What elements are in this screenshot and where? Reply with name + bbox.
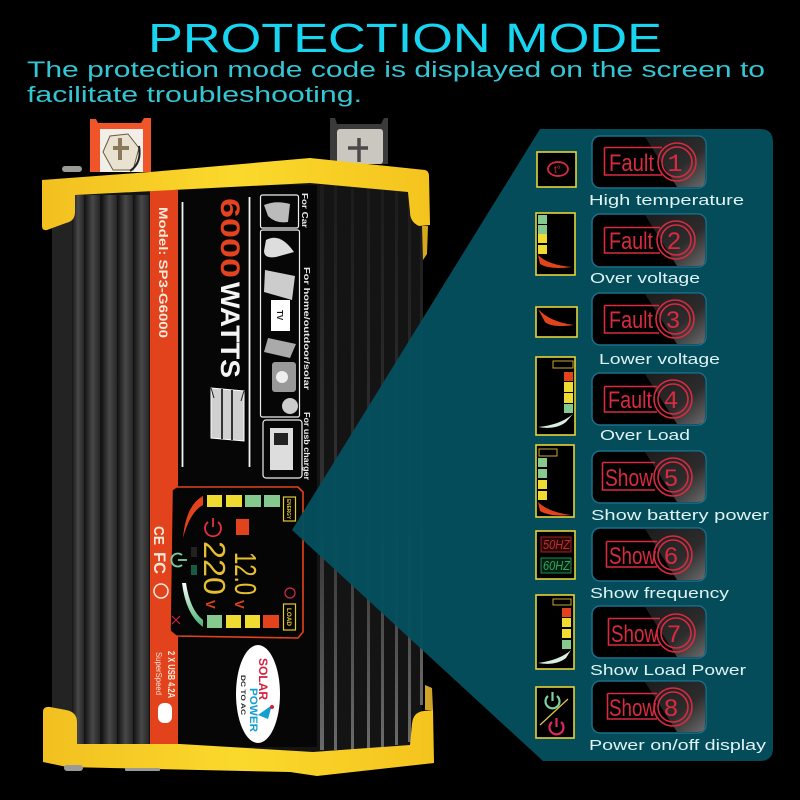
yellow bottom corner guard: [43, 707, 434, 776]
solar power logo: SOLAR: [256, 658, 270, 700]
fault display 4: Fault: [608, 387, 652, 414]
caption: Over Load: [600, 427, 690, 444]
icon: frequency: 60HZ: [543, 558, 571, 573]
icon: green power: [171, 554, 187, 566]
row 2: over voltage: [536, 213, 706, 287]
fault display 2: 2: [666, 228, 682, 257]
fault display 1: Fault: [609, 150, 654, 177]
usage captions: For home/outdoor/solar: [302, 267, 312, 391]
battery label: [284, 497, 296, 521]
icon: battery bars: [536, 445, 574, 517]
icon: temperature: t°: [554, 165, 561, 176]
icon: temperature: [537, 152, 576, 187]
callout panel: [292, 129, 773, 761]
left heat-sink fins: [52, 195, 149, 745]
icon: frequency: 50HZ: [543, 537, 571, 552]
fault display 1: 1: [667, 150, 683, 179]
6000 watts heading: [215, 198, 245, 378]
usage icon group: [260, 195, 302, 478]
certification marks: CE: [150, 526, 167, 545]
model text: Model: SP3-G6000: [156, 207, 168, 338]
icon: usb logo: [158, 703, 172, 723]
load label: LOAD: [285, 608, 291, 627]
fault display 3: Fault: [609, 307, 653, 334]
right heat-sink fins: [320, 185, 423, 750]
icon: inverter outline: [211, 388, 244, 441]
fault display 4: [592, 373, 706, 425]
yellow top corner guard: [42, 158, 430, 230]
yellow top sliver: [422, 226, 428, 260]
icon: positive terminal: [90, 118, 151, 172]
certification marks: FC: [150, 552, 169, 574]
title: PROTECTION MODE: [148, 15, 662, 61]
certification marks: [150, 526, 169, 598]
show display 6: 6: [663, 543, 679, 572]
caption: Show battery power: [591, 507, 769, 524]
body base: [52, 175, 422, 760]
row 4: over load: [536, 357, 706, 444]
show display 8: [592, 681, 706, 733]
fault display 2: [592, 214, 706, 267]
LCD screen: [170, 487, 303, 638]
usage captions: For Car: [300, 193, 310, 229]
row 7: show load power: [536, 595, 746, 679]
icon: frequency: [536, 531, 575, 579]
row 6: show frequency: [536, 528, 730, 602]
icon: battery: [236, 519, 249, 535]
show display 7: Show: [611, 621, 659, 648]
solar power logo: POWER: [247, 688, 259, 732]
volt units: V: [203, 600, 218, 609]
volt units: V: [232, 600, 247, 609]
icon: home appliances box: [260, 230, 300, 417]
inverter body: [52, 175, 423, 760]
subtitle text: The protection mode code is displayed on the screen to: [27, 57, 765, 82]
battery bars: [207, 495, 280, 507]
6000 watts heading: WATTS: [215, 282, 245, 378]
white rule lines: [182, 197, 250, 467]
yellow bottom sliver: [425, 685, 433, 710]
icon: usb charger box: [263, 420, 302, 478]
solar power logo: DC TO AC: [239, 675, 245, 716]
show display 8: Show: [609, 695, 657, 722]
icon: temperature: [285, 588, 295, 598]
solar power logo: [236, 645, 280, 743]
usage captions: For usb charger: [302, 412, 312, 481]
voltage digits: 12.0: [228, 552, 263, 595]
icon: red power: [205, 518, 221, 536]
red voltage arc: [183, 496, 203, 538]
fault display 1: [592, 136, 706, 188]
row 1: high temperature: [537, 136, 744, 209]
row 3: lower voltage: [536, 293, 720, 368]
caption: High temperature: [589, 192, 744, 209]
row 8: power on/off display: [536, 681, 767, 754]
caption: Over voltage: [590, 270, 700, 287]
fault display 2: Fault: [609, 228, 653, 255]
icon: voltage bars: [536, 213, 575, 275]
icon: negative terminal: [330, 118, 388, 164]
caption: Lower voltage: [599, 351, 720, 368]
show display 6: [592, 528, 706, 581]
usb spec text: SuperSpeed: [154, 652, 164, 695]
show display 5: Show: [605, 465, 654, 492]
caption: Power on/off display: [589, 737, 767, 754]
fault display 3: [592, 293, 706, 345]
show display 5: [592, 451, 706, 503]
orange band: [150, 190, 179, 745]
icon: fan: [172, 616, 180, 624]
load bars: [207, 615, 279, 628]
usage captions: [300, 193, 312, 481]
icon: power on off: [536, 687, 574, 738]
load label: [284, 604, 296, 630]
fault display 4: 4: [663, 387, 679, 416]
show display 7: 7: [666, 621, 682, 650]
fault display 3: 3: [665, 307, 681, 336]
usb spec text: 2 X USB 4.2A: [165, 651, 176, 698]
show display 6: Show: [609, 543, 657, 570]
icon: car box: [260, 195, 298, 228]
icon: load bars: [536, 595, 574, 669]
row 5: show battery power: [536, 445, 769, 524]
green load arc: [182, 583, 203, 627]
show display 5: 5: [663, 465, 679, 494]
voltage digits: [197, 541, 263, 595]
subtitle text: facilitate troubleshooting.: [27, 82, 362, 107]
subtitle text: [27, 57, 765, 107]
voltage digits: 220: [197, 541, 232, 595]
caption: Show frequency: [590, 585, 730, 602]
icon: voltage arc: [536, 307, 577, 337]
status indicators: [191, 547, 197, 575]
usb spec text: [154, 651, 176, 698]
show display 8: 8: [663, 695, 679, 724]
icon: home appliances box: TV: [275, 310, 284, 321]
battery label: ENERGY: [285, 499, 291, 520]
volt units: [203, 600, 247, 609]
caption: Show Load Power: [590, 662, 746, 679]
6000 watts heading: 6000: [215, 198, 245, 278]
show display 7: [592, 606, 706, 658]
icon: load bars: [536, 357, 575, 435]
bolts: [62, 166, 160, 771]
black label: [178, 185, 317, 747]
